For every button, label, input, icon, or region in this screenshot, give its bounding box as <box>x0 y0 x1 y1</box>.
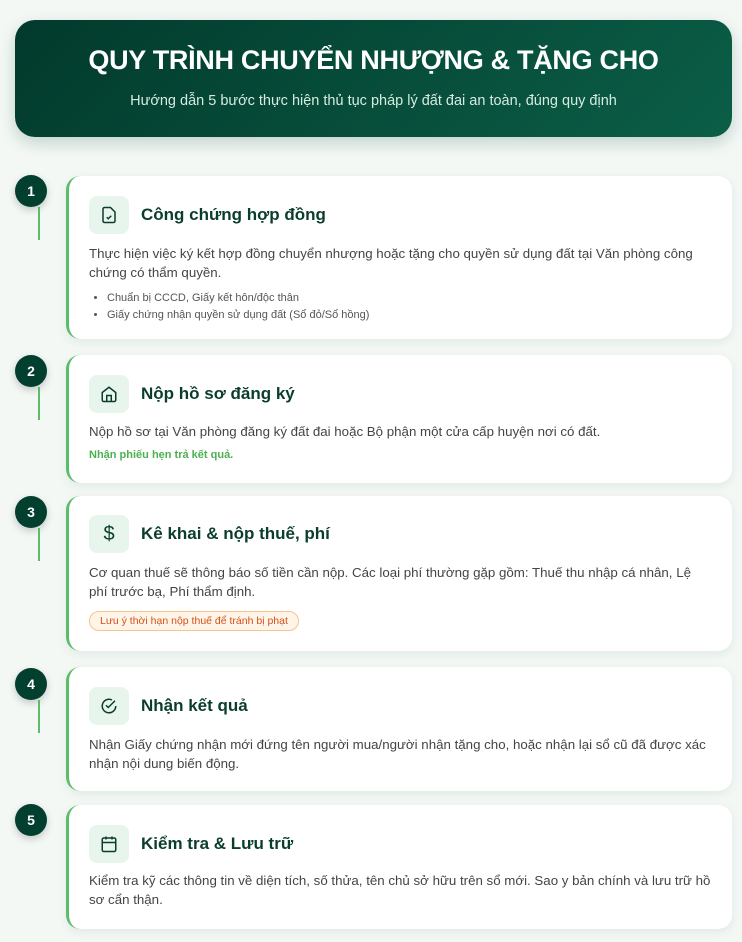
title 5: Kiểm tra & Lưu trữ <box>141 834 293 853</box>
icon: document check <box>89 196 129 234</box>
subtitle: Hướng dẫn 5 bước thực hiện thủ tục pháp lý đất đai an toàn, đúng quy định <box>130 93 617 109</box>
icon: calendar <box>89 825 129 863</box>
step 5 number: 5 <box>27 812 35 828</box>
card 4 <box>66 667 732 791</box>
title 2: Nộp hồ sơ đăng ký <box>141 384 295 403</box>
step 1 number: 1 <box>27 183 35 199</box>
icon: home <box>89 375 129 413</box>
icon: check circle <box>89 687 129 725</box>
title 3: Kê khai & nộp thuế, phí <box>141 524 330 543</box>
title 4: Nhận kết quả <box>141 696 248 715</box>
step 3 number <box>15 496 47 528</box>
bullets: Giấy chứng nhận quyền sử dụng đất (Sổ đỏ/Sổ hồng) <box>107 309 369 321</box>
step 2 number <box>15 355 47 387</box>
card 3 <box>66 496 732 651</box>
warning tag: Lưu ý thời hạn nộp thuế để tránh bị phạt <box>100 615 288 627</box>
card 1 <box>66 176 732 339</box>
note 2: Nhận phiếu hẹn trả kết quả. <box>89 449 233 461</box>
text 1: Thực hiện việc ký kết hợp đồng chuyển nhượng hoặc tặng cho quyền sử dụng đất tại Văn phòng công chứng có thẩm quyền. <box>89 246 693 280</box>
step 4 number: 4 <box>27 676 35 692</box>
icon: dollar <box>89 515 129 553</box>
header <box>15 20 732 137</box>
step 3 number: 3 <box>27 504 35 520</box>
title: QUY TRÌNH CHUYỂN NHƯỢNG & TẶNG CHO <box>88 45 659 75</box>
text 2: Nộp hồ sơ tại Văn phòng đăng ký đất đai hoặc Bộ phận một cửa cấp huyện nơi có đất. <box>89 424 600 439</box>
step 1 number <box>15 175 47 207</box>
text 4: Nhận Giấy chứng nhận mới đứng tên người mua/người nhận tặng cho, hoặc nhận lại sổ cũ đã được xác nhận nội dung biến động. <box>89 737 706 770</box>
step 2 number: 2 <box>27 363 35 379</box>
card 5 <box>66 805 732 929</box>
step 5 number <box>15 804 47 836</box>
bullets <box>94 292 369 321</box>
text 3: Cơ quan thuế sẽ thông báo số tiền cần nộp. Các loại phí thường gặp gồm: Thuế thu nhập cá nhân, Lệ phí trước bạ, Phí thẩm định. <box>89 565 691 598</box>
icon: dollar: $ <box>103 522 115 544</box>
card 2 <box>66 355 732 483</box>
warning tag <box>89 611 299 631</box>
step 4 number <box>15 668 47 700</box>
bullets: Chuẩn bị CCCD, Giấy kết hôn/độc thân <box>107 292 299 304</box>
title 1: Công chứng hợp đồng <box>141 205 326 224</box>
text 5: Kiểm tra kỹ các thông tin về diện tích, số thửa, tên chủ sở hữu trên sổ mới. Sao y bản chính và lưu trữ hồ sơ cẩn thận. <box>89 873 710 906</box>
